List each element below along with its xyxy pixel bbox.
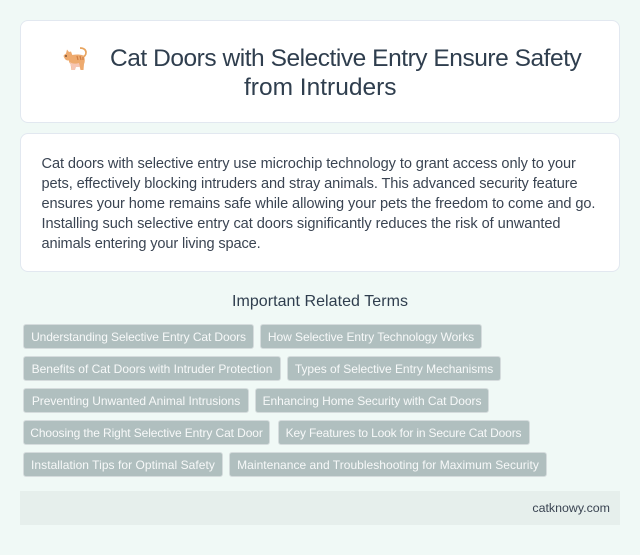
tag [255, 388, 489, 413]
tag [23, 452, 223, 477]
text block: description: pets, effectively blocking intruders and stray animals. This advanced security feature [42, 176, 578, 192]
title: Cat Doors with Selective Entry Ensure Safety [110, 45, 581, 72]
title: from Intruders [244, 74, 396, 101]
panel: description [20, 133, 620, 272]
tag [260, 324, 482, 349]
tag [278, 420, 530, 445]
tag: Installation Tips for Optimal Safety [31, 458, 215, 472]
footer [20, 491, 620, 525]
tag: Benefits of Cat Doors with Intruder Protection [32, 362, 272, 376]
tag: Key Features to Look for in Secure Cat Doors [286, 426, 521, 440]
tag: Choosing the Right Selective Entry Cat Door [30, 426, 263, 440]
title [110, 45, 582, 101]
heading: related terms: Important Related Terms [232, 293, 408, 310]
tag: Preventing Unwanted Animal Intrusions [32, 394, 240, 408]
tag [23, 324, 254, 349]
tag: How Selective Entry Technology Works [268, 330, 474, 344]
text block: description: Installing such selective entry cat doors significantly reduces the risk of unwanted [42, 216, 560, 232]
footer text: catknowy.com [532, 501, 610, 515]
tag [23, 420, 270, 445]
tag: Understanding Selective Entry Cat Doors [31, 330, 246, 344]
text block: description: ensures your home remains safe while allowing your pets the freedom to come and go. [42, 196, 595, 212]
text block: description: Cat doors with selective entry use microchip technology to grant access only to your [42, 156, 576, 172]
panel: title card [20, 20, 620, 123]
text block: description: animals entering your living space. [42, 236, 260, 252]
icon: cat [64, 47, 87, 70]
tag [229, 452, 547, 477]
tag list [23, 324, 547, 477]
tag [287, 356, 501, 381]
tag: Types of Selective Entry Mechanisms [295, 362, 493, 376]
tag: Enhancing Home Security with Cat Doors [263, 394, 481, 408]
tag [23, 388, 249, 413]
tag: Maintenance and Troubleshooting for Maximum Security [237, 458, 539, 472]
text block: description [42, 156, 595, 252]
tag [23, 356, 281, 381]
